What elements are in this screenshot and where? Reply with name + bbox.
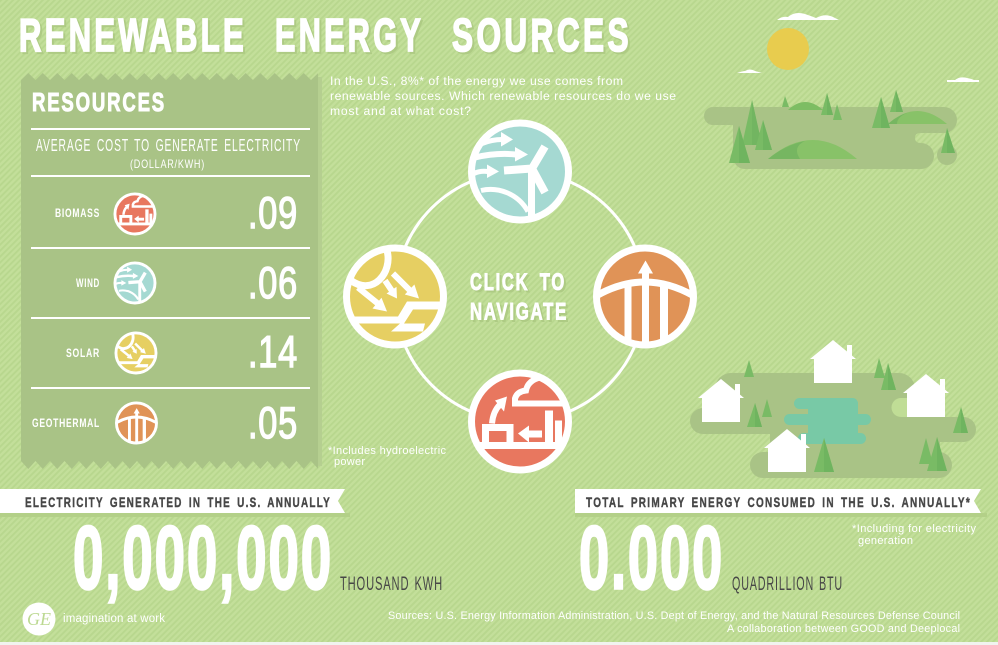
row: wind: WIND bbox=[76, 278, 100, 290]
icon: wind bbox=[470, 122, 570, 222]
footnote: electricity generation: generation bbox=[858, 535, 913, 547]
hills bbox=[768, 102, 947, 159]
main title: ENERGY bbox=[275, 9, 424, 61]
sources: Sources: U.S. Energy Information Administration, U.S. Dept of Energy, and the Natural Resources Defense Council bbox=[388, 610, 960, 622]
sources bbox=[388, 610, 960, 635]
row: geothermal: .05 bbox=[248, 399, 298, 448]
sources: A collaboration between GOOD and Deeplocal bbox=[727, 623, 960, 635]
footnote: hydroelectric bbox=[328, 445, 446, 468]
footnote: hydroelectric: power bbox=[334, 456, 365, 468]
house bbox=[810, 340, 856, 383]
footnote: hydroelectric: *Includes hydroelectric bbox=[328, 445, 446, 457]
cloud bbox=[777, 13, 839, 20]
row: geothermal: GEOTHERMAL bbox=[32, 418, 100, 430]
bottom page edge bbox=[0, 642, 998, 645]
cost heading: AVERAGE COST TO GENERATE ELECTRICITY bbox=[36, 135, 301, 155]
navigation ring bbox=[395, 172, 645, 422]
row: geothermal bbox=[32, 399, 298, 448]
row: solar bbox=[31, 328, 310, 389]
GE logo bbox=[22, 602, 56, 636]
cost heading bbox=[31, 128, 310, 177]
land shape bbox=[690, 373, 976, 478]
main title: RENEWABLE bbox=[19, 9, 247, 61]
GE logo: GE bbox=[27, 609, 51, 629]
small cloud right bbox=[947, 77, 979, 82]
row: biomass bbox=[31, 189, 310, 249]
footnote: electricity generation bbox=[852, 523, 976, 547]
intro text: In the U.S., 8%* of the energy we use comes from bbox=[330, 74, 623, 88]
trees bbox=[729, 90, 955, 163]
sun bbox=[767, 28, 809, 70]
icon: geothermal bbox=[595, 246, 695, 348]
main title: SOURCES bbox=[452, 9, 632, 61]
stat: electricity number: THOUSAND KWH bbox=[340, 573, 443, 595]
banner: electricity generated: ELECTRICITY GENERATED IN THE U.S. ANNUALLY bbox=[25, 494, 331, 510]
pond bbox=[784, 398, 871, 444]
tagline: imagination at work bbox=[63, 613, 165, 625]
house bbox=[764, 429, 810, 472]
stat: energy number: 0.000 bbox=[579, 508, 724, 608]
row: wind bbox=[31, 259, 310, 319]
small cloud left bbox=[737, 70, 762, 73]
panel: resources bbox=[21, 73, 322, 469]
row: biomass: BIOMASS bbox=[55, 208, 100, 220]
footnote: electricity generation: *Including for electricity bbox=[852, 523, 976, 535]
stat: energy number: QUADRILLION BTU bbox=[732, 573, 843, 595]
house bbox=[698, 379, 744, 422]
stat: electricity number: 0,000,000 bbox=[73, 508, 333, 608]
panel background with zigzag edges bbox=[21, 73, 322, 469]
trees bbox=[744, 358, 968, 472]
click to navigate label: CLICK TO bbox=[470, 269, 566, 296]
intro text: renewable sources. Which renewable resources do we use bbox=[330, 89, 676, 103]
panel heading: RESOURCES bbox=[32, 89, 166, 117]
illustration: village and pond bbox=[690, 340, 976, 478]
banner: electricity generated bbox=[0, 489, 350, 517]
row: solar: .14 bbox=[248, 328, 298, 377]
house bbox=[903, 374, 949, 417]
cost heading: (DOLLAR/KWH) bbox=[130, 157, 205, 171]
row: biomass: .09 bbox=[248, 189, 298, 238]
click to navigate label bbox=[470, 269, 568, 326]
row: wind: .06 bbox=[248, 259, 298, 308]
row: solar: SOLAR bbox=[66, 348, 100, 360]
icon: solar bbox=[345, 246, 445, 346]
illustration: sun and countryside bbox=[704, 13, 979, 169]
land shape bbox=[704, 107, 957, 169]
main title bbox=[19, 9, 632, 61]
icon: biomass bbox=[468, 372, 572, 472]
click to navigate label: NAVIGATE bbox=[470, 298, 568, 326]
intro text bbox=[330, 74, 676, 118]
intro text: most and at what cost? bbox=[330, 104, 471, 118]
banner: primary energy bbox=[575, 489, 987, 517]
